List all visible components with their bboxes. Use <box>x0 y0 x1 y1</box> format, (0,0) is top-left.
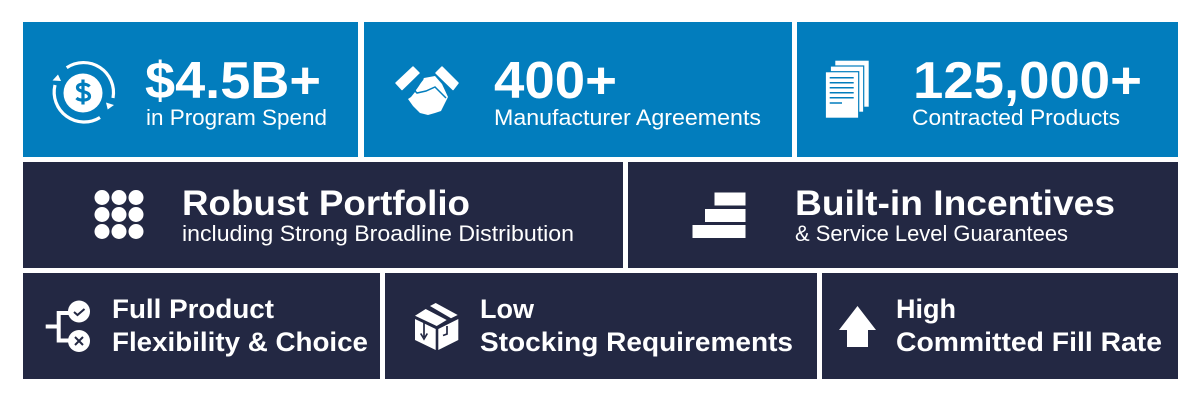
icon: stairs <box>692 192 746 238</box>
icon: box <box>415 303 458 350</box>
panel: flexibility <box>23 273 380 379</box>
text: High: High <box>896 294 956 324</box>
panel: program spend <box>23 22 358 157</box>
label: Service Level Guarantees: & Service Level Guarantees <box>795 221 1068 246</box>
stat: 400+: 400+ <box>494 52 617 110</box>
heading: Built-in Incentives: Built-in Incentives <box>795 184 1115 223</box>
text: Flexibility & Choice: Flexibility & Choice <box>112 327 368 357</box>
panel: stocking <box>385 273 817 379</box>
icon: documents <box>825 61 869 118</box>
label: Contracted Products: Contracted Products <box>912 105 1120 130</box>
panel: robust portfolio <box>23 162 623 268</box>
icon: dot grid <box>94 190 144 239</box>
text: Full Product: Full Product <box>112 294 274 324</box>
stat: $4.5B+: $4.5B+ <box>145 52 321 110</box>
text: Low: Low <box>480 294 535 324</box>
icon: dollar cycle <box>52 63 114 122</box>
icon: up arrow <box>839 306 876 347</box>
label: in Program Spend: in Program Spend <box>146 105 327 130</box>
panel: manufacturer agreements <box>364 22 792 157</box>
heading: Robust Portfolio: Robust Portfolio <box>182 184 470 223</box>
panel: built-in incentives <box>628 162 1178 268</box>
text: Committed Fill Rate: Committed Fill Rate <box>896 327 1162 357</box>
label: including Strong Broadline Distribution: including Strong Broadline Distribution <box>182 221 574 246</box>
stat: 125,000+: 125,000+ <box>913 52 1142 110</box>
panel: contracted products <box>797 22 1178 157</box>
panel: fill rate <box>822 273 1178 379</box>
icon: handshake <box>396 67 458 115</box>
label: Manufacturer Agreements: Manufacturer Agreements <box>494 105 761 130</box>
icon: branching choice <box>46 300 90 352</box>
text: Stocking Requirements: Stocking Requirements <box>480 327 793 357</box>
